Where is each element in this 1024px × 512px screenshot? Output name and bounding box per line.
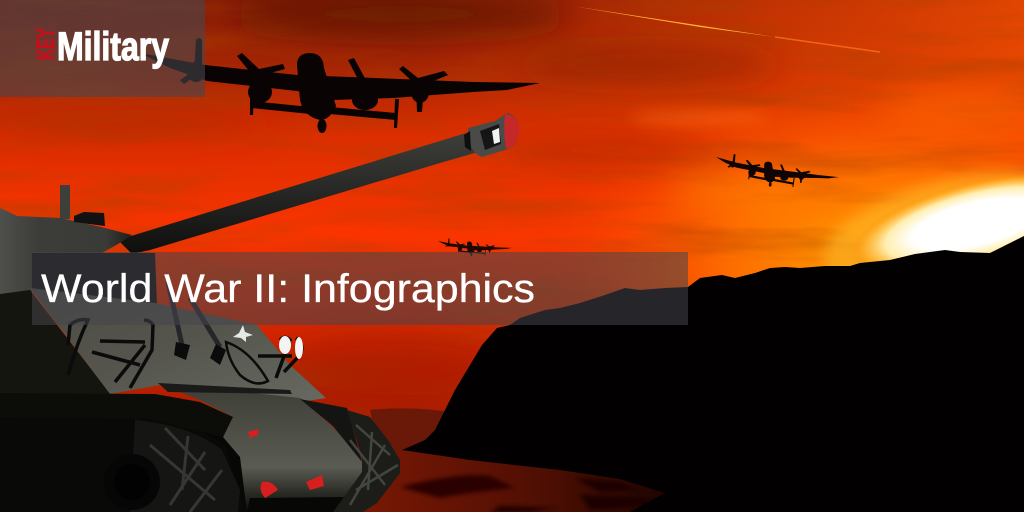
glacis plate: [30, 288, 326, 402]
turret hatch: [74, 212, 105, 226]
contrail: [572, 6, 880, 52]
gun barrel: [118, 133, 478, 254]
mountain silhouette: [402, 236, 1024, 512]
tank: [0, 113, 519, 512]
hatch blocks: [174, 342, 226, 365]
right fender: [300, 399, 362, 462]
headlight reflections: [279, 336, 303, 359]
hull front: [157, 383, 362, 512]
hull vent: [158, 383, 292, 394]
hatch handles: [68, 282, 302, 388]
hull star: [233, 325, 253, 342]
logo: KEY: [32, 28, 60, 60]
front track: [104, 420, 240, 512]
turret: [0, 208, 132, 296]
fender: [0, 393, 233, 437]
logo: Military: [57, 25, 170, 69]
hull underside: [247, 497, 347, 512]
title: World War II: Infographics: [41, 267, 535, 311]
red tow hooks: [248, 429, 324, 498]
running gear: [0, 402, 247, 512]
turret lower shadow: [32, 253, 157, 305]
ground reflection: [360, 452, 680, 512]
sun glow: [811, 150, 1024, 314]
bomber: large: [140, 38, 540, 133]
logo panel: [0, 0, 205, 97]
distant hills: [370, 408, 450, 455]
hull side: [0, 290, 112, 396]
bomber: medium: [714, 152, 840, 193]
right track: [333, 410, 400, 512]
title panel: [32, 252, 688, 325]
logo: [32, 25, 170, 69]
antenna mount: [60, 185, 70, 219]
bomber: small: [438, 238, 512, 257]
muzzle brake: [464, 113, 519, 157]
lower hull shadow: [0, 400, 345, 512]
